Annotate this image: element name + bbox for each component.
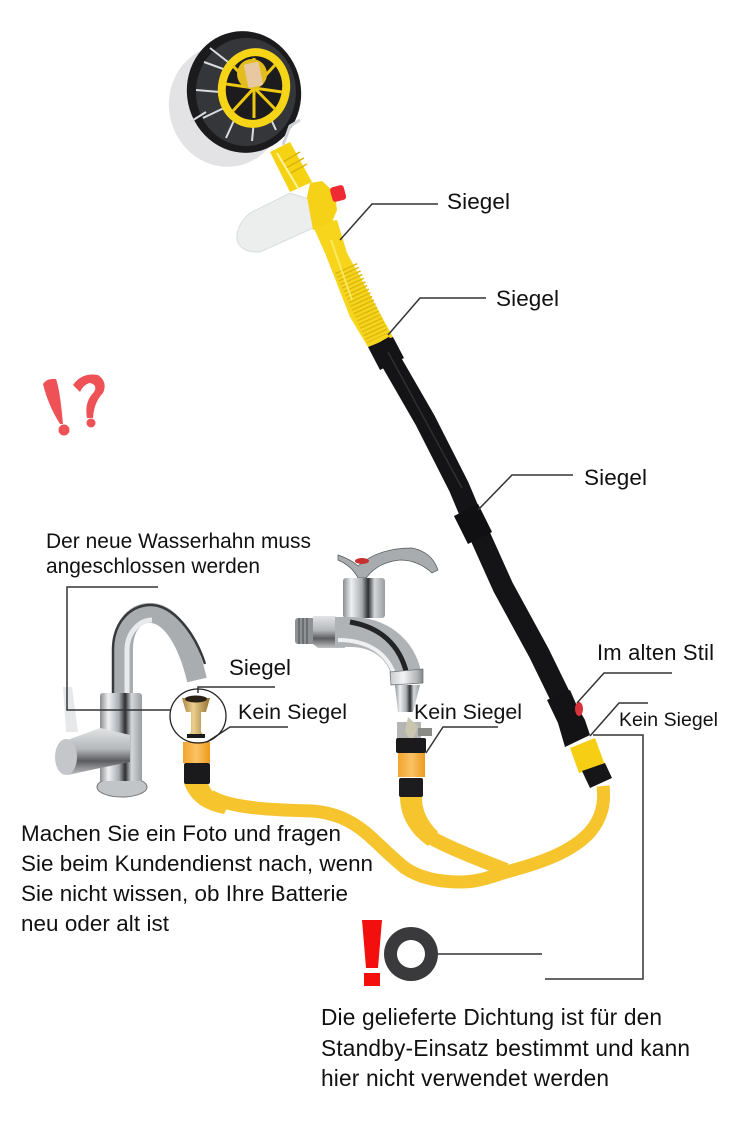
heading: new faucet note xyxy=(46,530,311,578)
base xyxy=(97,777,147,797)
label: Kein Siegel right: Kein Siegel xyxy=(619,709,718,731)
black disc xyxy=(176,20,312,164)
quick connector xyxy=(396,717,432,797)
text block: photo advice xyxy=(21,821,373,936)
heading: new faucet note: Der neue Wasserhahn muss xyxy=(46,530,311,553)
label: Siegel faucet: Siegel xyxy=(229,655,291,680)
lever xyxy=(63,687,78,732)
label: Kein Siegel faucet: Kein Siegel xyxy=(238,700,347,724)
handle xyxy=(338,548,438,578)
text block: seal note xyxy=(321,1004,690,1091)
tap body xyxy=(343,578,385,618)
icon: red exclamation mark xyxy=(362,920,382,986)
leader lines xyxy=(67,204,672,979)
curved spout xyxy=(335,632,407,680)
label: Siegel middle: Siegel xyxy=(496,286,559,311)
clear cup xyxy=(237,193,313,252)
wall tap xyxy=(295,548,438,797)
clear spoke dome xyxy=(190,38,300,146)
text block: seal note: Standby-Einsatz bestimmt und kann xyxy=(321,1035,690,1061)
heading: new faucet note: angeschlossen werden xyxy=(46,555,260,578)
thread inlet xyxy=(295,616,345,648)
magnifier circle xyxy=(170,689,226,743)
orange quick connector xyxy=(183,742,210,784)
white brush back xyxy=(158,34,294,178)
text block: photo advice: Sie nicht wissen, ob Ihre Batterie xyxy=(21,881,348,906)
gooseneck spout xyxy=(123,613,197,695)
black hose section xyxy=(368,337,560,696)
text block: seal note: hier nicht verwendet werden xyxy=(321,1065,609,1091)
hoses xyxy=(184,783,604,882)
text block: photo advice: neu oder alt ist xyxy=(21,911,170,936)
bottom connector xyxy=(547,690,612,788)
yellow gear ring xyxy=(215,46,293,130)
label: Siegel top: Siegel xyxy=(447,189,510,214)
brass adapter xyxy=(182,696,210,738)
label: Kein Siegel wall tap: Kein Siegel xyxy=(414,700,522,724)
body xyxy=(100,693,142,785)
left faucet xyxy=(55,605,210,797)
red knob xyxy=(329,184,347,203)
text block: photo advice: Sie beim Kundendienst nach, wenn xyxy=(21,851,373,876)
label: Siegel hose: Siegel xyxy=(584,465,647,490)
ribbed yellow tube xyxy=(312,220,393,347)
yellow stem xyxy=(270,142,312,192)
knob xyxy=(56,728,130,775)
icon: exclamation and question marks xyxy=(43,374,105,436)
yellow collar xyxy=(307,181,337,230)
wash brush wand xyxy=(158,20,612,788)
icon: rubber washer xyxy=(384,927,438,981)
text block: photo advice: Machen Sie ein Foto und fragen xyxy=(21,821,341,846)
label: Im alten Stil: Im alten Stil xyxy=(597,640,714,665)
text block: seal note: Die gelieferte Dichtung ist für den xyxy=(321,1004,662,1030)
